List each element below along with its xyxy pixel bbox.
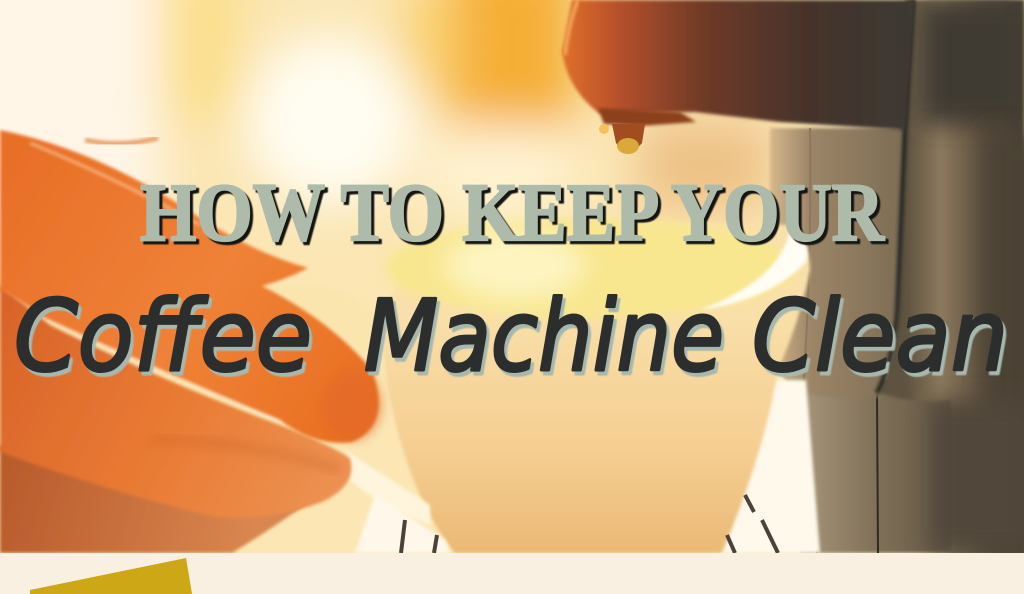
drip tray [355,495,778,553]
hand: index finger [0,130,379,443]
hand: third finger [0,445,305,553]
title line 2: Coffee [14,280,312,394]
cup [344,214,812,553]
hand: white gap between fingers [40,316,285,424]
mustard tab [30,558,192,594]
machine spout [562,0,915,130]
background glow [0,0,770,270]
coffee machine lower body [800,380,996,553]
white gap between cup and machine [715,380,820,553]
hand: fingertip [342,376,388,446]
hand: middle finger [0,285,351,518]
bottom cream section [0,553,1024,594]
title line 2 [14,280,1008,394]
title line 1: HOW TO KEEP YOUR [140,166,885,258]
title line 2: Machine [364,280,724,394]
title line 2: Clean [752,280,1008,394]
coffee machine right column [880,0,1024,553]
coffee machine front panel [770,128,905,398]
cup handle [345,450,430,525]
coffee drop [599,124,645,154]
